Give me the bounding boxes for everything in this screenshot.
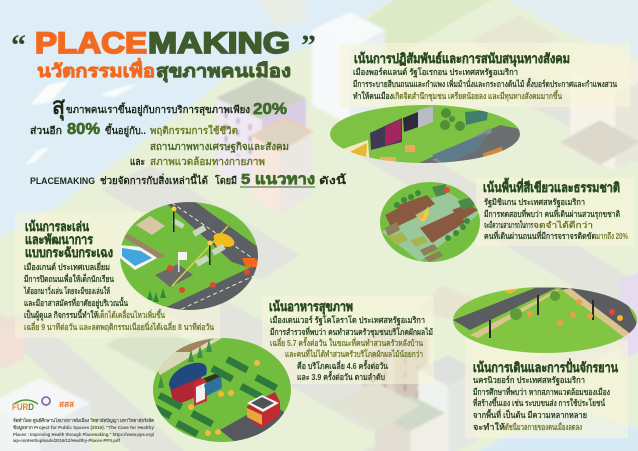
panel: play text: และมีอาสาสมัครที่อาศัยอยู่บริเวณนั้น <box>24 296 128 309</box>
panel: healthy food text: และคนที่ไม่ได้ทำสวนครัวบริโภคผักผลไม้น้อยกว่า <box>285 347 423 359</box>
panel: walking and cycling text: จากพื้นที่ เป็นต้น มีความหลากหลาย <box>473 408 587 420</box>
panel: social interaction text: เน้นการปฏิสัมพันธ์และการสนับสนุนทางสังคม <box>354 51 570 67</box>
panel: healthy food text: และ 3.9 ครั้งต่อวัน ตามลำดับ <box>297 370 385 382</box>
intro text block: 20% <box>253 101 287 118</box>
intro text block: ช่วยจัดการกับสิ่งเหล่านี้ได้ <box>100 173 208 187</box>
intro text block: พฤติกรรมการใช้ชีวิต <box>150 124 238 137</box>
title <box>11 27 316 62</box>
title: PLACE <box>35 27 147 60</box>
panel: play text <box>23 219 214 332</box>
logos <box>12 397 74 412</box>
intro text block: ส่วนอีก <box>30 125 62 137</box>
title: ” <box>301 29 316 62</box>
illustration: walking and cycling plaza <box>450 285 638 355</box>
panel: play text: เฉลี่ย 9 นาทีต่อวัน และลดพฤติกรรมเนือยนิ่งได้เฉลี่ย 8 นาทีต่อวัน <box>24 320 214 332</box>
panel: walking background <box>465 340 628 438</box>
title: “ <box>11 29 26 62</box>
intro text block: สุ <box>52 93 65 122</box>
panel: walking and cycling text: จะทำให้ <box>473 422 505 432</box>
intro text block: PLACEMAKING <box>30 176 95 187</box>
illustration: park beds <box>380 182 480 262</box>
panel: nature text: คนที่เดินผ่านถนนที่มีการจราจรติดขัด <box>484 229 596 241</box>
intro text block: และ <box>130 157 145 168</box>
panel: healthy food text: เฉลี่ย 5.7 ครั้งต่อวัน ในขณะที่คนทำสวนครัวหลังบ้าน <box>270 336 423 348</box>
illustration: social street art <box>330 105 520 163</box>
panel: play text: เป็นผู้ดูแล กิจกรรมนี้ทำให้ <box>24 308 98 321</box>
panel: nature text: รัฐมิชิแกน ประเทศสหรัฐอเมริกา <box>484 197 585 208</box>
logo: ThaiHealth: สสส <box>59 399 74 409</box>
panel: nature text <box>483 177 628 241</box>
panel: healthy food text: เมืองเดนเวอร์ รัฐโคโลราโด ประเทศสหรัฐอเมริกา <box>270 315 425 326</box>
intro text block: ขึ้นอยู่กับ.. <box>105 123 146 138</box>
credit text <box>12 417 155 443</box>
panel: social interaction text: เกิดจิตสำนึกชุมชน เครียดน้อยลง และมีทุนทางสังคมมากขึ้น <box>393 89 562 102</box>
panel: walking and cycling text: ดัชนีมวลกายของคนเมืองลดลง <box>505 422 582 432</box>
panel: walking and cycling text <box>473 358 618 432</box>
subtitle <box>37 58 291 83</box>
intro text block: ขภาพคนเราขึ้นอยู่กับการบริการสุขภาพเพียง <box>66 102 250 117</box>
intro text block: โดยมี <box>214 174 237 187</box>
panel: play text: เน้นการละเล่น <box>25 219 89 234</box>
panel: play text: เมืองเกนต์ ประเทศเบลเยี่ยม <box>24 260 110 272</box>
credit text: จัดทำโดย ศูนย์ศึกษานโยบายการผังเมือง วิทยาลัยปัญญา มหาวิทยาลัยรังสิต <box>13 417 154 424</box>
subtitle: สุขภาพคนเมือง <box>156 61 291 83</box>
title: MAKING <box>148 27 290 60</box>
panel: healthy food text <box>269 299 433 382</box>
logo: FURD: FURD <box>12 402 34 412</box>
intro text block: ดังนี้ <box>319 173 347 187</box>
credit text: wp-content/uploads/2016/12/Healthy-Places-PPS.pdf <box>12 438 120 443</box>
panel: play text: เด็กได้เคลื่อนไหวเพิ่มขึ้น <box>98 308 165 320</box>
credit text: ข้อมูลจาก Project for Public Spaces (2016). "The Case for Healthy <box>13 424 154 431</box>
panel: social interaction text: เมืองพอร์ตแลนด์ รัฐโอเรกอน ประเทศสหรัฐอเมริกา <box>353 67 518 78</box>
subtitle: นวัตกรรมเพื่อ <box>37 58 155 81</box>
panel: play text: แบบกระฉับกระเฉง <box>25 245 113 260</box>
panel: walking and cycling text: นครนิวยอร์ก ประเทศสหรัฐอเมริกา <box>473 375 585 386</box>
intro text block: สถานภาพทางเศรษฐกิจและสังคม <box>150 141 289 153</box>
intro text block: 80% <box>67 121 100 138</box>
intro text block: สภาพแวดล้อมทางกายภาพ <box>150 156 265 168</box>
illustration: play street <box>120 202 258 310</box>
illustration: farm <box>153 338 291 442</box>
panel: nature background <box>476 178 634 246</box>
intro text block <box>30 93 347 188</box>
panel: healthy food background <box>262 296 434 384</box>
panel: play text: และพัฒนาการ <box>25 232 93 247</box>
panel: nature text: จดจำได้ดีกว่า <box>533 220 593 230</box>
panel: social interaction text: ทำให้คนเมือง <box>353 91 393 101</box>
panel: social interaction text <box>353 51 617 102</box>
intro text block: 5 แนวทาง <box>241 171 315 188</box>
panel: play text: ได้ออกมาวิ่งเล่น โดยจะมีของเล่นให้ <box>23 284 110 296</box>
panel: healthy food text: เน้นอาหารสุขภาพ <box>269 299 353 315</box>
panel: healthy food text: คือ บริโภคเฉลี่ย 4.6 ครั้งต่อวัน <box>297 359 388 371</box>
panel: social support background <box>340 43 630 107</box>
logo: circle <box>42 397 50 405</box>
panel: nature text: จะมีความสามารถในการ <box>484 220 533 230</box>
panel: play background <box>15 212 220 338</box>
panel: healthy food text: มีการสำรวจที่พบว่า คนทำสวนครัวชุมชนบริโภคผักผลไม้ <box>270 325 433 338</box>
credit text: Places : Improving Health through Placemaking." https://www.pps.org/ <box>13 432 155 437</box>
panel: play text: มีการปิดถนนเพื่อให้เด็กนักเรียน <box>24 272 114 284</box>
